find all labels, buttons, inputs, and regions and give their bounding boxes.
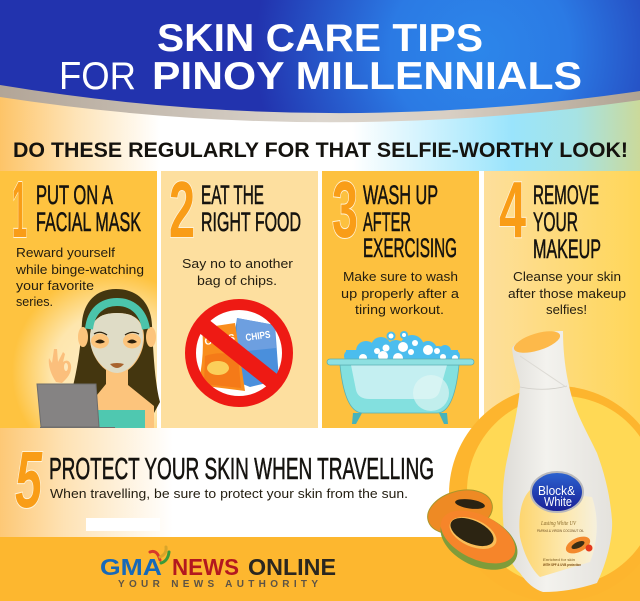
logo: GMA News Online: NEWS (172, 554, 239, 580)
body text 3: up properly after a (341, 286, 460, 301)
panel: tip 5 (0, 428, 640, 537)
laptop (37, 384, 115, 429)
body text 3: tiring workout. (355, 302, 444, 317)
heading 2 (201, 180, 301, 237)
hand (49, 349, 71, 383)
title: PINOY MILLENNIALS (152, 55, 582, 98)
body text 1: Reward yourself (16, 245, 115, 260)
subtitle: DO THESE REGULARLY FOR THAT SELFIE-WORTHY LOOK! (13, 138, 628, 162)
body text 3 (341, 269, 460, 317)
header banner (0, 0, 640, 122)
panel: tip 1 (0, 165, 160, 429)
title: SKIN CARE TIPS (157, 17, 483, 60)
logo: GMA News Online: GMA (100, 554, 162, 580)
title: FOR (59, 55, 136, 98)
body text 2: Say no to another (182, 256, 294, 271)
heading 1: FACIAL MASK (36, 207, 141, 237)
page background (0, 80, 640, 171)
body text 1: your favorite (16, 278, 94, 293)
icon: no chips sign (190, 304, 288, 402)
number 4: 4 (499, 165, 526, 254)
icon: bathtub (327, 331, 474, 424)
heading 3: EXERCISING (363, 233, 457, 263)
body text 1 (15, 245, 144, 309)
orange chip bag: CHIPS (204, 333, 236, 348)
body text 3: Make sure to wash (343, 269, 458, 284)
bottle label: Lasting White UV (540, 521, 577, 527)
body text 2: bag of chips. (197, 273, 277, 288)
body text 5: When travelling, be sure to protect your skin from the sun. (50, 486, 408, 501)
body text 1: while binge-watching (15, 262, 144, 277)
number 3: 3 (332, 165, 358, 254)
bubbles (344, 331, 460, 363)
front half (431, 500, 527, 581)
panel: tip 3 (322, 165, 479, 429)
panel: tip 1: 1 (12, 165, 27, 254)
bottle label (519, 472, 597, 577)
heading 2: EAT THE (201, 180, 264, 210)
body text 4: selfies! (546, 302, 587, 317)
icon: GMA heart (150, 547, 169, 563)
illustration: woman with face mask (37, 289, 160, 429)
heading 4 (533, 180, 601, 264)
bottle label: WITH SPF & UVB protection (543, 563, 581, 567)
panel: tip 4 (484, 165, 640, 429)
logo: GMA News Online: ONLINE (248, 554, 336, 580)
body text 2 (182, 256, 294, 288)
blue chip bag: CHIPS (245, 330, 271, 344)
number 5: 5 (15, 435, 43, 524)
product: papaya (423, 483, 527, 581)
body text 1: series. (16, 294, 53, 309)
heading 1: PUT ON A (36, 180, 113, 210)
product: lotion bottle (503, 327, 612, 592)
heading 3: AFTER (363, 207, 411, 237)
logo: GMA News Online: YOUR NEWS AUTHORITY (118, 579, 318, 590)
footer band (0, 537, 640, 601)
panel: tip 2 (161, 165, 318, 429)
body text 4: after those makeup (508, 286, 626, 301)
product circle (449, 386, 640, 601)
body text 4: Cleanse your skin (513, 269, 621, 284)
heading 2: RIGHT FOOD (201, 207, 301, 237)
body text 4 (508, 269, 626, 317)
heading 3 (363, 180, 457, 263)
bottle label: Enriched for skin (543, 558, 575, 562)
brand oval: White (544, 494, 572, 509)
heading 3: WASH UP (363, 180, 438, 210)
back half (423, 483, 497, 541)
heading 1 (36, 180, 141, 237)
brand oval (531, 472, 583, 512)
logo: GMA News Online (100, 547, 336, 590)
title (59, 17, 582, 98)
heading 4: YOUR (533, 207, 578, 237)
number 2: 2 (169, 165, 195, 254)
bottle label: PAPAYA & VIRGIN COCONUT OIL (537, 528, 585, 533)
brand oval: Block& (538, 483, 575, 498)
